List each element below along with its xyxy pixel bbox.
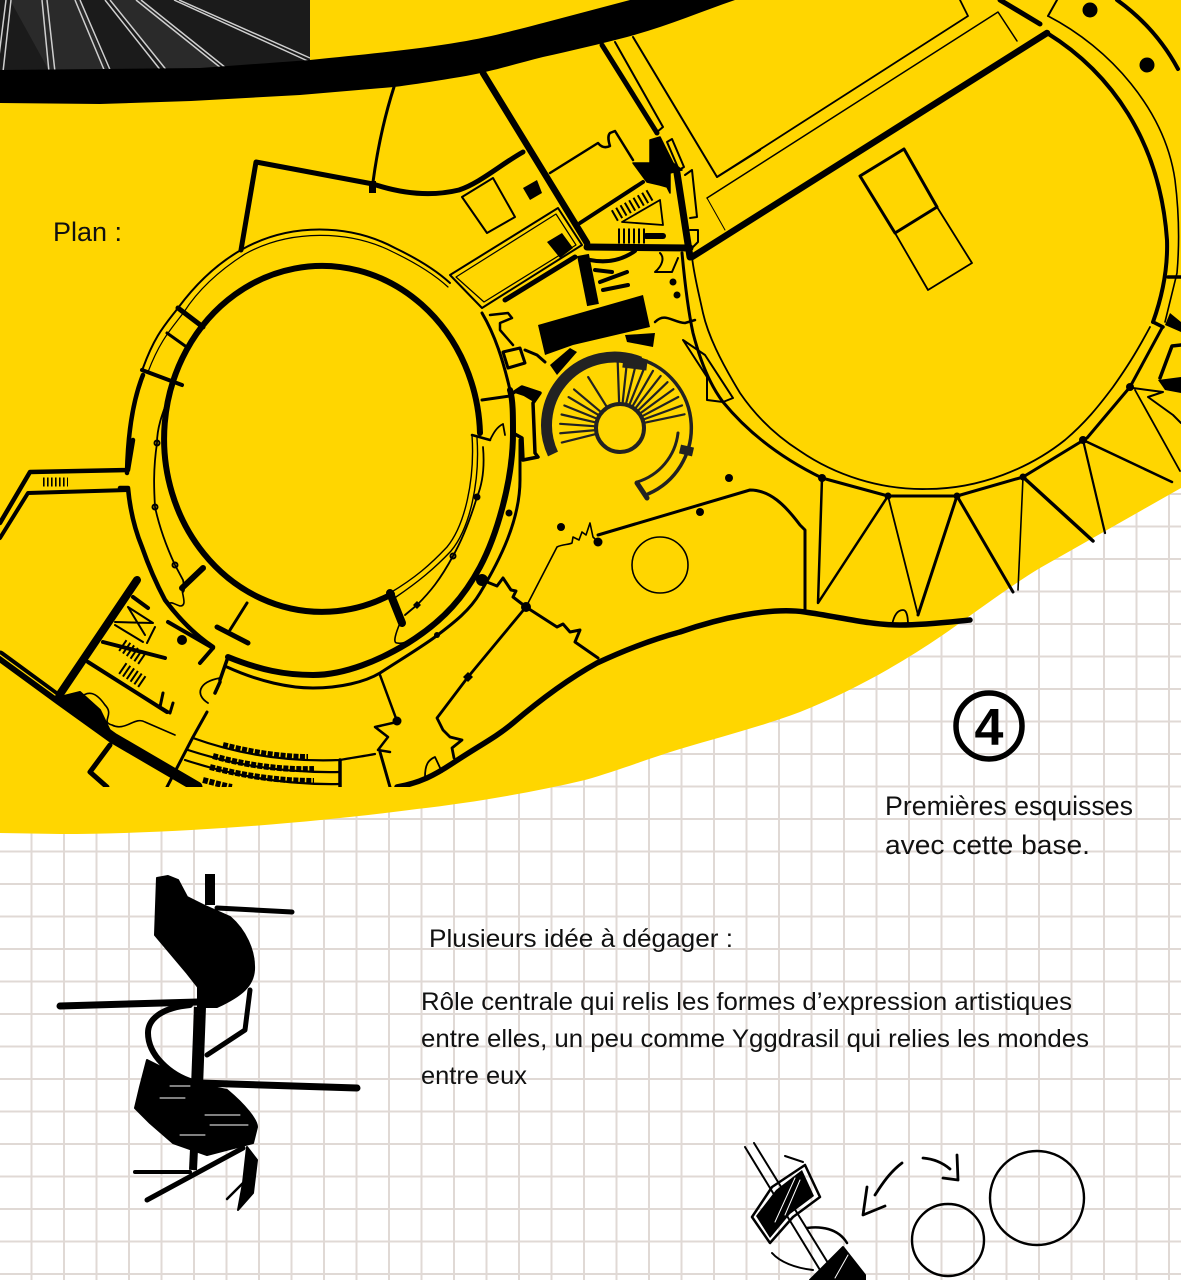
step number 4 badge: 4 xyxy=(975,699,1004,757)
heading: ideas: Plusieurs idée à dégager : xyxy=(429,925,733,953)
arena: left rotunda xyxy=(120,230,540,688)
spiral staircase in plan xyxy=(547,357,693,498)
floor plan xyxy=(0,0,1181,787)
sketch circles xyxy=(912,1151,1084,1276)
left wing walls xyxy=(0,440,248,787)
walls: upper left rooms xyxy=(241,73,587,308)
hall platform rectangle xyxy=(860,149,972,290)
body text: entre elles, un peu comme Yggdrasil qui relies les mondes xyxy=(421,1025,1089,1053)
caption: first sketches: avec cette base. xyxy=(885,830,1090,860)
sketch: small spiral study xyxy=(745,1143,865,1280)
zigzag facade xyxy=(818,383,1180,615)
sketch: spiral staircase elevation xyxy=(60,874,357,1210)
large D-shaped hall xyxy=(682,0,1181,496)
body text: Rôle centrale qui relis les formes d’expression artistiques xyxy=(421,988,1072,1016)
step number 4 badge xyxy=(956,693,1022,759)
photo: spiral staircase xyxy=(0,0,310,76)
right edge details xyxy=(1133,313,1181,423)
icon: rotation arrows xyxy=(863,1155,958,1215)
body text xyxy=(421,988,1089,1090)
caption: first sketches xyxy=(885,791,1133,860)
label: Plan: Plan : xyxy=(53,217,122,247)
body text: entre eux xyxy=(421,1062,527,1090)
yellow panel xyxy=(0,0,1181,834)
caption: first sketches: Premières esquisses xyxy=(885,791,1133,821)
thick black curved band xyxy=(0,0,735,104)
lower courtyard walls xyxy=(375,474,970,787)
walls: central service block xyxy=(490,37,760,402)
small theatre seating rows xyxy=(185,738,375,787)
